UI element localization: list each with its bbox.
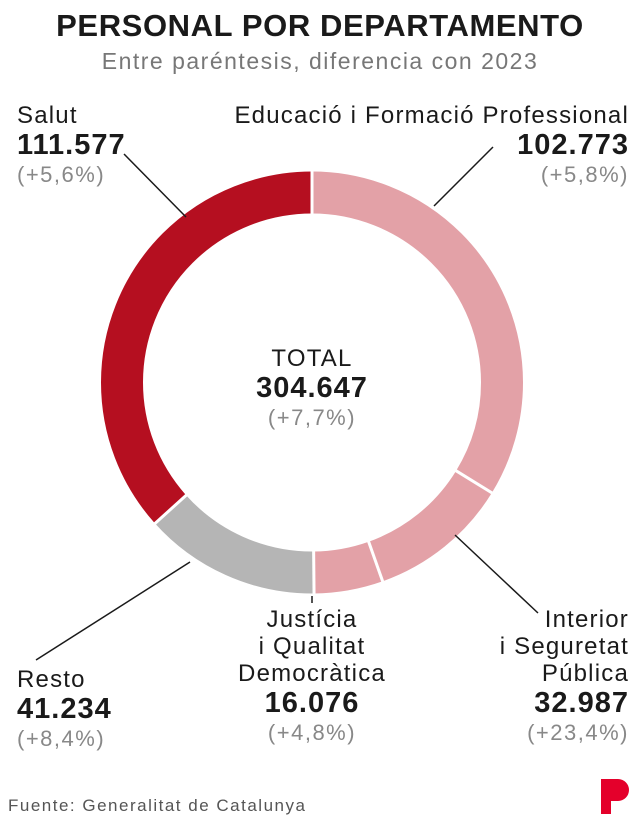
center total bbox=[256, 345, 368, 430]
subtitle: Entre paréntesis, diferencia con 2023 bbox=[102, 48, 538, 74]
label: Resto: Resto bbox=[17, 666, 86, 693]
label: Interior: 32.987 bbox=[534, 687, 629, 719]
label: Justícia: i Qualitat bbox=[259, 633, 365, 660]
label: Salut bbox=[17, 102, 126, 187]
label: Salut: 111.577 bbox=[17, 129, 126, 161]
center total: TOTAL bbox=[271, 345, 353, 372]
source: Fuente: Generalitat de Catalunya bbox=[8, 796, 306, 815]
label: Educació: Educació i Formació Professional bbox=[234, 102, 629, 129]
label: Interior bbox=[500, 606, 629, 745]
label: Justícia: Justícia bbox=[267, 606, 357, 633]
label: Salut: (+5,6%) bbox=[17, 162, 105, 187]
label: Resto: (+8,4%) bbox=[17, 726, 105, 751]
title: PERSONAL POR DEPARTAMENTO bbox=[56, 8, 584, 43]
label: Justícia: 16.076 bbox=[265, 687, 359, 719]
label: Justícia bbox=[238, 606, 386, 745]
label: Interior: i Seguretat bbox=[500, 633, 629, 660]
label: Educació: 102.773 bbox=[517, 129, 629, 161]
label: Justícia: (+4,8%) bbox=[268, 720, 356, 745]
label: Educació bbox=[234, 102, 629, 187]
label: Interior: Interior bbox=[545, 606, 629, 633]
label: Interior: (+23,4%) bbox=[527, 720, 629, 745]
label: Resto: 41.234 bbox=[17, 693, 112, 725]
label: Justícia: Democràtica bbox=[238, 660, 386, 687]
logo bbox=[601, 779, 629, 814]
label: Educació: (+5,8%) bbox=[541, 162, 629, 187]
label: Resto bbox=[17, 666, 112, 751]
label: Interior: Pública bbox=[542, 660, 629, 687]
center total: 304.647 bbox=[256, 372, 368, 404]
label: Salut: Salut bbox=[17, 102, 78, 129]
center total: (+7,7%) bbox=[268, 405, 356, 430]
